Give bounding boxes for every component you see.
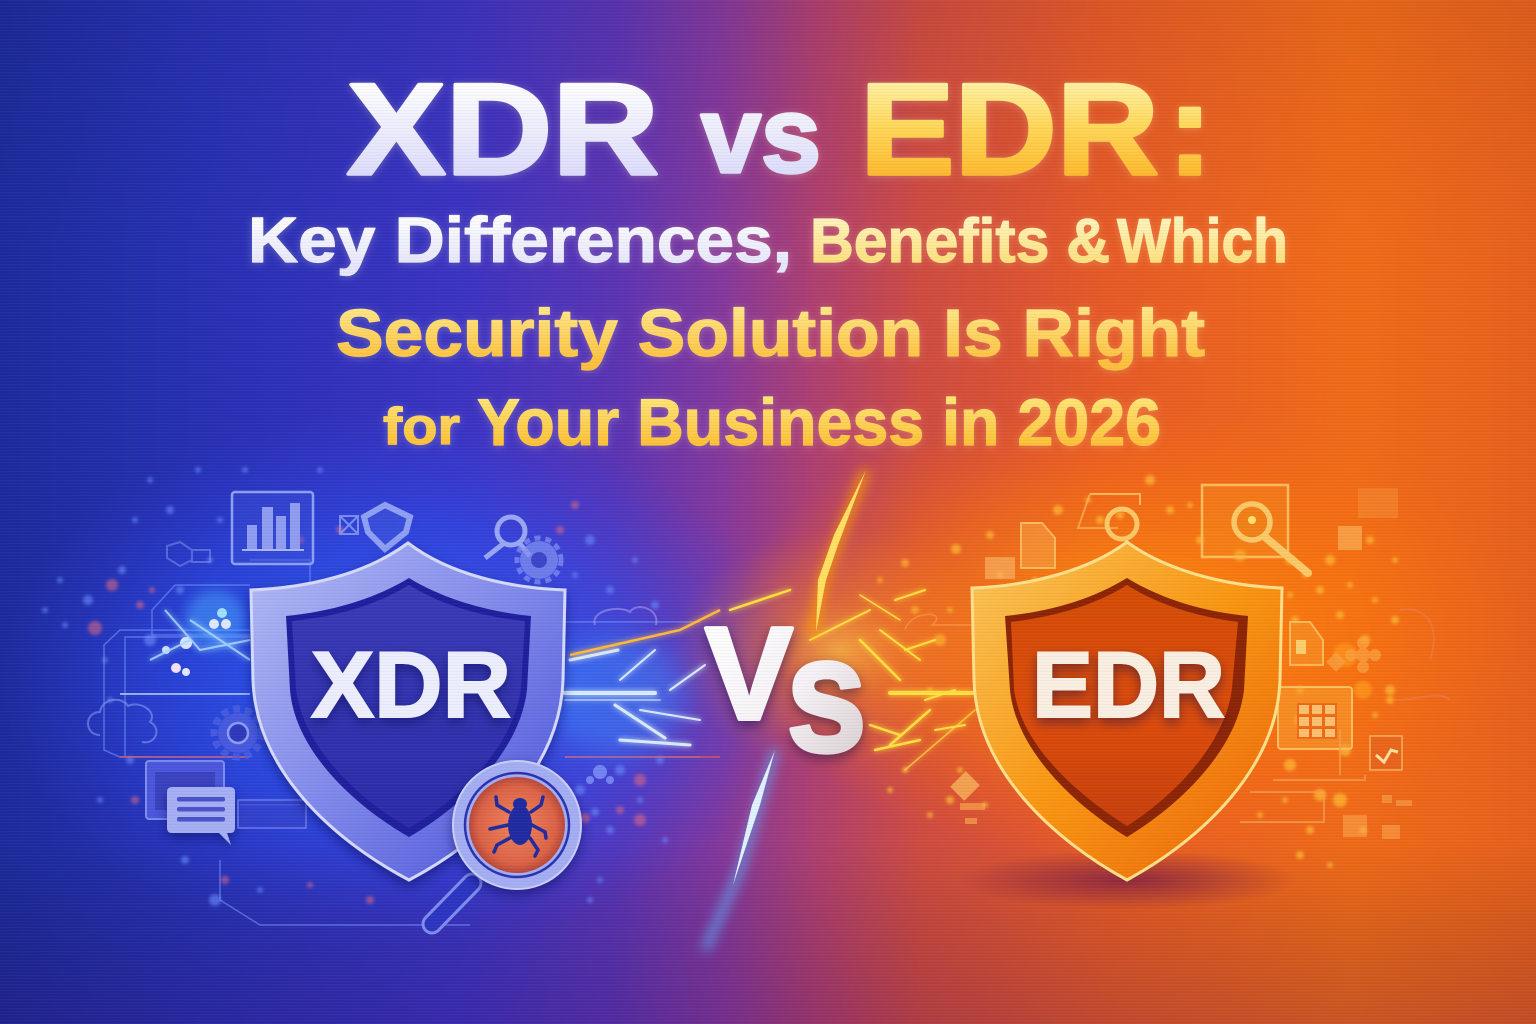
shield label: XDR — [311, 632, 511, 737]
lens — [469, 777, 565, 873]
frame — [453, 761, 581, 889]
glowing nodes: blue — [150, 590, 250, 676]
icon: window panel — [146, 761, 224, 819]
energy sparks — [545, 470, 975, 950]
title line 2: Key Differences, — [248, 204, 792, 276]
shield outer — [972, 542, 1282, 880]
lightning: lower — [733, 750, 775, 885]
title block — [248, 56, 1288, 459]
icon: cloud — [88, 700, 156, 742]
icon: small shield — [364, 505, 410, 549]
shield label: EDR — [1032, 632, 1225, 737]
icon: outline boxes — [1240, 730, 1365, 822]
blue sparks — [565, 650, 705, 745]
icon: small box — [340, 516, 358, 534]
icon: left outline cloud — [905, 614, 972, 630]
vs mark: s — [786, 602, 867, 786]
icon: top search ring — [1078, 494, 1140, 539]
right curve — [1395, 609, 1450, 700]
tech particles: blue side — [42, 467, 668, 906]
icon: chart tile — [1370, 736, 1402, 770]
icon: chat bubble — [167, 787, 235, 845]
shield: XDR — [251, 543, 565, 880]
tech particles: orange side — [877, 475, 1399, 868]
shield inner — [1005, 578, 1248, 837]
title line 1: EDR — [860, 56, 1159, 202]
icon: top right panel — [1358, 488, 1398, 518]
tech icons and circuit lines: blue side — [88, 492, 720, 925]
tech icons: orange side — [905, 485, 1450, 839]
icon: small parcels — [167, 542, 210, 566]
icon: right cloud — [594, 607, 656, 625]
shadow under EDR shield — [957, 850, 1297, 910]
bright line — [120, 693, 250, 695]
shield inner — [286, 578, 531, 837]
lightning: lower glow — [705, 750, 775, 950]
icon: bug — [490, 797, 546, 856]
icon: tile grid — [1338, 526, 1362, 550]
lightning: upper — [816, 470, 866, 632]
magnifier with bug — [432, 761, 581, 924]
title line 1: XDR — [347, 56, 659, 202]
handle — [432, 883, 472, 924]
shield outer — [251, 543, 565, 880]
vs mark: V — [705, 600, 793, 747]
blue halo — [545, 635, 685, 755]
vs mark — [705, 600, 867, 786]
icon: table panel — [1278, 687, 1352, 749]
title line 2: Which — [1117, 207, 1288, 276]
data panel — [238, 800, 306, 828]
background glow: orange — [730, 400, 1530, 860]
orange sparks — [730, 590, 975, 770]
icon: doc with search — [1202, 485, 1308, 573]
title line 4: for — [383, 398, 460, 456]
background glow: blue — [0, 410, 800, 950]
orange streak — [570, 610, 720, 655]
icon: tile bottom — [1343, 795, 1412, 839]
title line 1: vs — [701, 74, 821, 195]
icon: doc left — [1021, 523, 1055, 568]
icon: cube — [985, 557, 1015, 579]
accent line: red — [120, 756, 720, 758]
icon: small card — [950, 771, 980, 801]
icon: doc right — [1290, 622, 1323, 665]
title line 1: : — [1168, 56, 1212, 202]
shield: EDR — [972, 542, 1282, 880]
icon: bar chart panel — [232, 492, 313, 564]
icon: right small node — [586, 765, 614, 784]
title line 4: Your Business in 2026 — [477, 385, 1161, 459]
icon: large gear — [214, 709, 262, 757]
title line 3: Security Solution Is Right — [336, 296, 1205, 371]
shield face — [292, 585, 525, 828]
circuit lines — [104, 560, 700, 925]
title line 1 — [347, 56, 1212, 202]
icon: gear — [517, 538, 561, 582]
icon: flower cluster — [1326, 637, 1381, 673]
ring — [465, 773, 569, 877]
title line 2: Benefits & — [810, 207, 1110, 276]
lightning: upper glow — [812, 470, 866, 635]
shield face — [1011, 585, 1238, 826]
title line 2 — [248, 204, 1288, 276]
center glow — [670, 530, 1010, 770]
icon: search — [485, 517, 530, 558]
icon: bars left — [960, 803, 985, 824]
